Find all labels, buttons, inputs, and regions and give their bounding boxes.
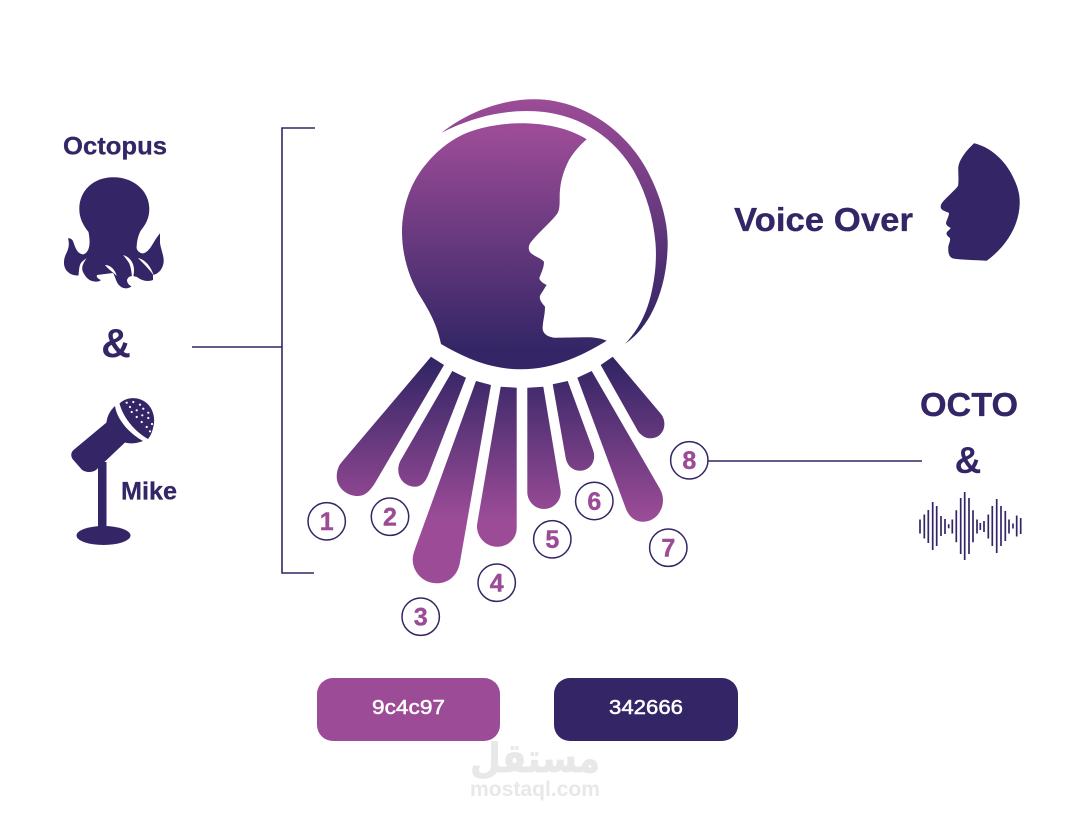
marker 6: 6: [587, 488, 601, 516]
marker 8: [671, 442, 708, 479]
tentacle 3: [413, 381, 491, 583]
marker 3: [402, 598, 439, 635]
marker 6: [576, 482, 613, 520]
icon: sound wave: [920, 492, 1021, 560]
colour swatch: indigo: [554, 678, 738, 741]
crescent arc: [442, 99, 668, 344]
marker 8: 8: [682, 447, 696, 475]
icon: microphone: [71, 398, 154, 545]
tentacle 6: [553, 381, 594, 471]
label: Mike: Mike: [121, 478, 177, 506]
marker 4: [478, 564, 515, 601]
colour swatch: purple: [317, 678, 500, 741]
numbered markers: [308, 442, 708, 635]
heading: Voice Over: Voice Over: [734, 201, 913, 238]
icon: face profile: [941, 143, 1020, 261]
icon: octopus: [64, 177, 164, 288]
left column: octopus and mike: [63, 132, 177, 545]
marker 7: 7: [661, 535, 675, 563]
marker 2: [371, 498, 409, 535]
marker 2: 2: [383, 504, 397, 532]
heading: Octopus: Octopus: [63, 132, 167, 160]
ampersand: &: [955, 440, 981, 481]
microphone head: [120, 398, 154, 439]
microphone stand: [98, 462, 106, 532]
marker 1: 1: [320, 508, 334, 536]
heading: OCTO: OCTO: [920, 386, 1018, 423]
microphone handle and band: [71, 406, 143, 472]
watermark: مستقل: [470, 736, 600, 782]
tentacle 2: [398, 371, 466, 487]
colour swatch: indigo: 342666: [609, 697, 683, 719]
marker 3: 3: [414, 604, 428, 632]
connector: marker 8 to OCTO: [708, 460, 922, 462]
watermark: mostaql.com: [470, 778, 600, 801]
marker 5: [534, 521, 571, 558]
watermark: [470, 736, 600, 801]
marker 5: 5: [545, 526, 559, 554]
tentacle 7: [577, 371, 663, 522]
face silhouette: [402, 123, 607, 369]
marker 7: [650, 529, 687, 566]
colour swatch: purple: 9c4c97: [372, 697, 445, 719]
tentacle 8: [601, 357, 664, 438]
tentacle 1: [337, 357, 444, 496]
ampersand: &: [101, 320, 131, 366]
bracket connector: [192, 128, 315, 573]
tentacle 5: [527, 387, 561, 509]
marker 1: [308, 503, 345, 540]
marker 4: 4: [490, 570, 504, 598]
tentacle 4: [477, 387, 517, 547]
main logo: head and tentacles: [337, 99, 668, 583]
